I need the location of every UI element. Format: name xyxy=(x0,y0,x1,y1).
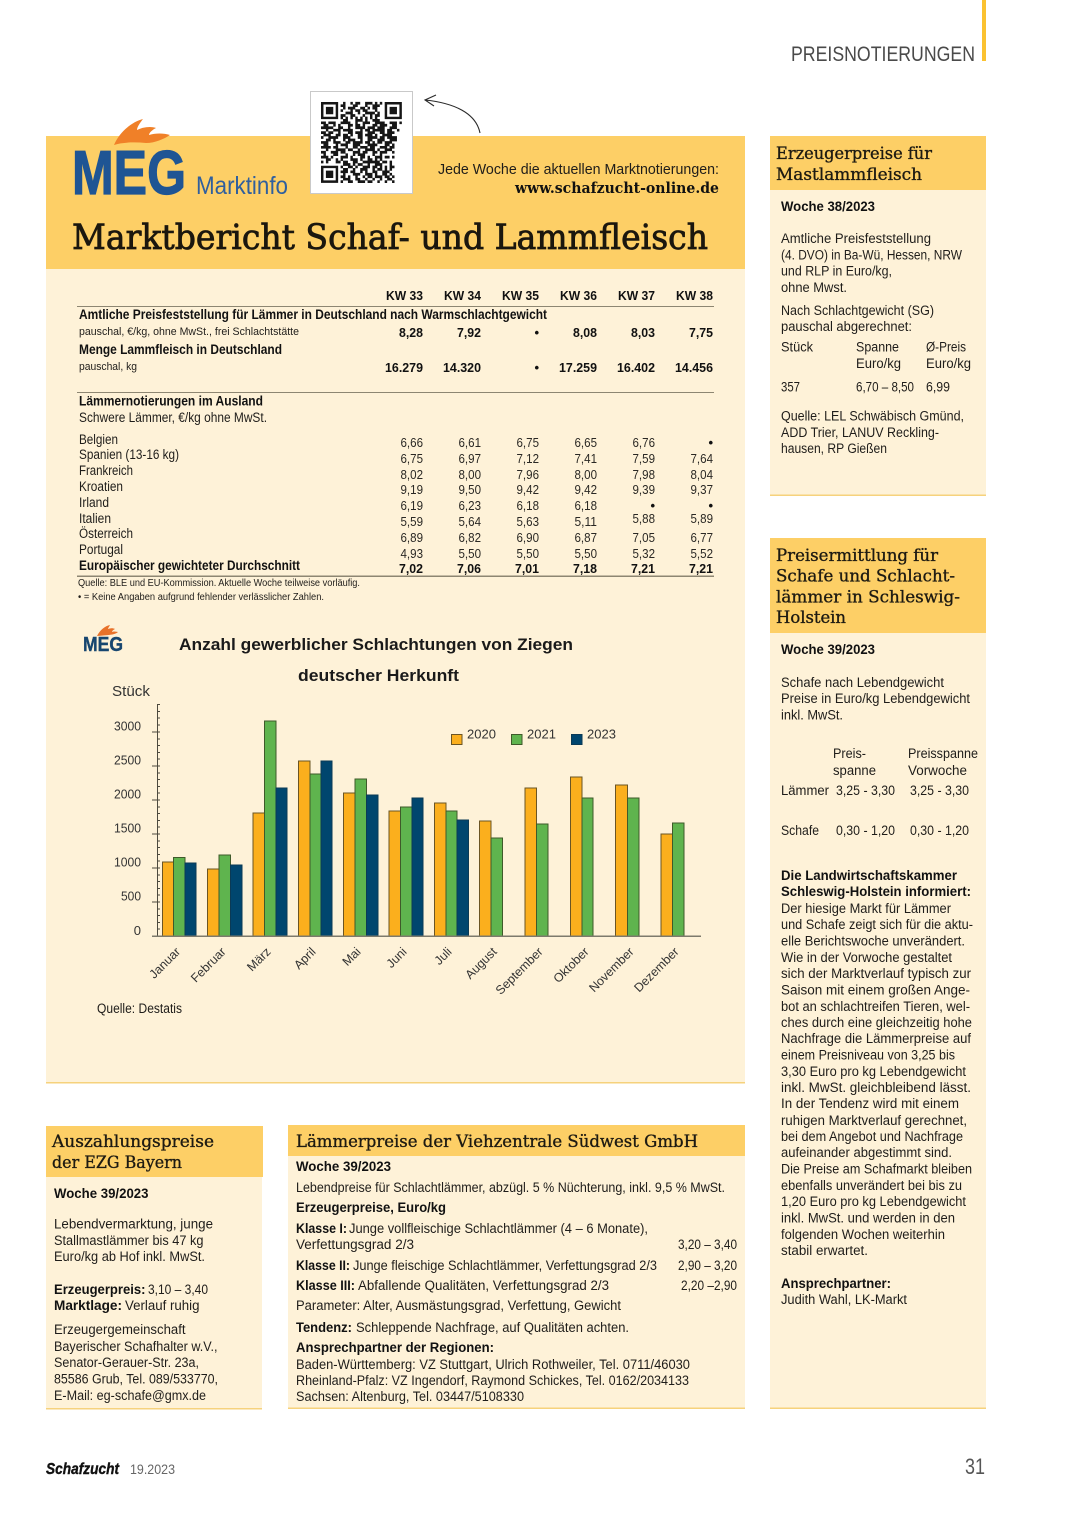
logo: MEG Marktinfo xyxy=(72,119,288,208)
market commentary: ebenfalls unverändert bei bis zu xyxy=(781,1178,962,1193)
text block: Erzeugerpreis: xyxy=(54,1282,146,1297)
month labels: Mai xyxy=(340,945,364,969)
legend: 2020 xyxy=(467,726,496,742)
foreign quotations: 6,76 xyxy=(632,435,655,450)
price block: Schafe nach Lebendgewicht xyxy=(781,675,944,690)
text block xyxy=(54,1186,218,1403)
heading: Lämmerpreise der Viehzentrale Südwest GmbH xyxy=(296,1132,698,1152)
heading xyxy=(51,1132,214,1173)
heading xyxy=(776,546,960,628)
foreign quotations: 5,89 xyxy=(690,511,713,526)
month labels: Juni xyxy=(384,945,410,971)
text block: Woche 39/2023 xyxy=(296,1159,391,1174)
text block: hausen, RP Gießen xyxy=(781,441,887,456)
price block: 0,30 - 1,20 xyxy=(910,823,969,838)
legend: 2023 xyxy=(587,726,616,742)
price table xyxy=(77,288,714,603)
chart title xyxy=(179,635,573,685)
domestic rows: Amtliche Preisfeststellung für Lämmer in Deutschland nach Warmschlachtgewicht xyxy=(79,307,547,322)
text block: Rheinland-Pfalz: VZ Ingendorf, Raymond Schickes, Tel. 0162/2034133 xyxy=(296,1373,689,1388)
price block: Lämmer xyxy=(781,783,829,798)
text block: Euro/kg xyxy=(856,356,901,371)
footer: 31 xyxy=(965,1454,985,1479)
text block: 357 xyxy=(781,380,800,394)
foreign quotations: 6,90 xyxy=(516,530,539,545)
legend: 2021 xyxy=(527,726,556,742)
foreign quotations: Irland xyxy=(79,495,109,510)
foreign quotations: 6,18 xyxy=(574,498,597,513)
table footnotes: Quelle: BLE und EU-Kommission. Aktuelle Woche teilweise vorläufig. xyxy=(78,578,360,589)
heading: der EZG Bayern xyxy=(52,1153,182,1173)
text block: Tendenz: xyxy=(296,1320,352,1335)
foreign quotations: 6,82 xyxy=(458,530,481,545)
price block xyxy=(781,642,978,838)
text block: Stallmastlämmer bis 47 kg xyxy=(54,1233,204,1248)
market commentary: folgenden Wochen weiterhin xyxy=(781,1227,945,1242)
heading: Holstein xyxy=(776,608,846,628)
foreign quotations: 8,04 xyxy=(690,467,713,482)
text block: 6,70 – 8,50 xyxy=(856,380,914,394)
text block: Junge fleischige Schlachtlämmer, Verfettungsgrad 2/3 xyxy=(353,1258,657,1273)
y axis: Stück xyxy=(112,683,151,700)
price block: Schafe xyxy=(781,823,819,838)
heading xyxy=(776,144,933,185)
text block: Amtliche Preisfeststellung xyxy=(781,231,931,246)
price block: Preis- xyxy=(833,746,866,761)
month labels xyxy=(146,944,682,997)
table header: calendar weeks: KW 33 xyxy=(386,288,423,303)
heading: Erzeugerpreise für xyxy=(776,144,933,164)
domestic rows: pauschal, kg xyxy=(79,361,137,373)
foreign quotations: 5,50 xyxy=(574,546,597,561)
foreign quotations: 7,59 xyxy=(632,451,655,466)
foreign quotations: 9,42 xyxy=(574,482,597,497)
text block: Stück xyxy=(781,340,813,354)
y axis xyxy=(112,683,160,938)
foreign quotations: 5,63 xyxy=(516,514,539,529)
market commentary: Ansprechpartner: xyxy=(781,1276,891,1291)
foreign quotations: 7,01 xyxy=(515,561,539,576)
domestic rows: 14.320 xyxy=(443,360,481,375)
text block: 2,20 –2,90 xyxy=(681,1278,737,1293)
month labels: März xyxy=(244,945,274,974)
month labels: April xyxy=(291,945,319,972)
price block: 0,30 - 1,20 xyxy=(836,823,895,838)
section tab: Preisnotierungen: PREISNOTIERUNGEN xyxy=(791,43,975,66)
text block: Euro/kg xyxy=(926,356,971,371)
text block: Sachsen: Altenburg, Tel. 03447/5108330 xyxy=(296,1389,524,1404)
footer: 19.2023 xyxy=(130,1462,175,1477)
foreign quotations xyxy=(79,394,713,576)
foreign quotations: 8,02 xyxy=(400,467,423,482)
foreign quotations: • xyxy=(708,435,713,450)
logo: MEG Marktinfo: MEG xyxy=(72,139,186,208)
market commentary: sich der Marktverlauf typisch zur xyxy=(781,966,971,981)
y axis: 2500 xyxy=(114,752,141,768)
heading: Schafe und Schlacht- xyxy=(776,566,955,586)
price block: spanne xyxy=(833,763,876,778)
foreign quotations: 6,19 xyxy=(400,498,423,513)
market commentary: Wie in der Vorwoche gestaltet xyxy=(781,950,952,965)
y axis: 0 xyxy=(134,923,141,938)
market commentary: In der Tendenz wird mit einem xyxy=(781,1096,959,1111)
price block: 3,25 - 3,30 xyxy=(910,783,969,798)
market commentary: Judith Wahl, LK-Markt xyxy=(781,1292,907,1307)
text block: Parameter: Alter, Ausmästungsgrad, Verfettung, Gewicht xyxy=(296,1298,621,1313)
market commentary: und Schafe zeigt sich für die aktu- xyxy=(781,917,973,932)
foreign quotations: 4,93 xyxy=(400,546,423,561)
foreign quotations: Spanien (13-16 kg) xyxy=(79,447,179,462)
table header: calendar weeks: KW 36 xyxy=(560,288,597,303)
icon: small MEG logo: MEG xyxy=(83,634,123,656)
legend xyxy=(452,726,616,744)
source: Quelle: Destatis xyxy=(97,1001,182,1016)
text block: Euro/kg ab Hof inkl. MwSt. xyxy=(54,1249,205,1264)
market commentary: einem Preisniveau von 3,25 bis xyxy=(781,1048,955,1062)
bar chart: Schlachtungen von Ziegen xyxy=(83,625,701,1016)
text block: 3,20 – 3,40 xyxy=(678,1237,737,1252)
text block: Ø-Preis xyxy=(926,340,966,354)
month labels: Februar xyxy=(188,945,229,985)
heading: Mastlammfleisch xyxy=(776,165,922,185)
text block: Woche 38/2023 xyxy=(781,199,875,214)
text block: Woche 39/2023 xyxy=(54,1186,149,1201)
foreign quotations: 9,39 xyxy=(632,482,655,497)
market commentary: bei dem Angebot und Nachfrage xyxy=(781,1129,963,1144)
foreign quotations: 7,64 xyxy=(690,451,713,466)
domestic rows: 7,75 xyxy=(689,325,713,340)
foreign quotations: 8,00 xyxy=(574,467,597,482)
foreign quotations: 5,64 xyxy=(458,514,481,529)
foreign quotations: Frankreich xyxy=(79,463,133,478)
text block: Schleppende Nachfrage, auf Qualitäten achten. xyxy=(356,1320,629,1335)
foreign quotations: 5,59 xyxy=(400,514,423,529)
panel: Erzeugerpreise für Mastlammfleisch xyxy=(770,136,986,496)
foreign quotations: 6,23 xyxy=(458,498,481,513)
foreign quotations: 6,87 xyxy=(574,530,597,545)
foreign quotations: 9,42 xyxy=(516,482,539,497)
domestic rows: 16.402 xyxy=(617,360,655,375)
bars 2020 xyxy=(162,761,672,936)
text block: Klasse III: xyxy=(296,1278,355,1293)
text block: pauschal abgerechnet: xyxy=(781,319,912,334)
foreign quotations: 5,50 xyxy=(458,546,481,561)
text block: Erzeugergemeinschaft xyxy=(54,1322,186,1337)
text block: Quelle: LEL Schwäbisch Gmünd, xyxy=(781,408,964,424)
y axis: 500 xyxy=(121,888,141,904)
text block: Ansprechpartner der Regionen: xyxy=(296,1340,494,1355)
y axis: 3000 xyxy=(114,718,141,734)
heading: Preisermittlung für xyxy=(776,546,939,566)
table header: calendar weeks xyxy=(386,288,713,303)
foreign quotations: • xyxy=(708,498,713,513)
domestic rows: pauschal, €/kg, ohne MwSt., frei Schlachtstätte xyxy=(79,326,299,338)
domestic rows: 16.279 xyxy=(385,360,423,375)
foreign quotations: 5,11 xyxy=(574,514,597,529)
market commentary: Der hiesige Markt für Lämmer xyxy=(781,901,951,916)
table footnotes: • = Keine Angaben aufgrund fehlender verlässlicher Zahlen. xyxy=(78,592,324,603)
text block: Verlauf ruhig xyxy=(125,1298,200,1313)
header note: www.schafzucht-online.de xyxy=(514,179,719,197)
month labels: Juli xyxy=(432,945,455,968)
panel: Marktbericht xyxy=(46,92,745,1084)
month labels: Oktober xyxy=(551,945,592,986)
market commentary: stabil erwartet. xyxy=(781,1243,868,1258)
market commentary xyxy=(781,868,973,1307)
price block: 3,25 - 3,30 xyxy=(836,783,895,798)
foreign quotations: 5,32 xyxy=(632,546,655,561)
text block: 3,10 – 3,40 xyxy=(148,1282,208,1297)
logo: MEG Marktinfo: Marktinfo xyxy=(196,172,288,200)
heading: Auszahlungspreise xyxy=(51,1132,214,1152)
market commentary: 1,20 Euro pro kg Lebendgewicht xyxy=(781,1194,966,1209)
icon: small MEG logo xyxy=(83,625,123,656)
chart title: Anzahl gewerblicher Schlachtungen von Ziegen xyxy=(179,635,573,654)
text block: Abfallende Qualitäten, Verfettungsgrad 2/3 xyxy=(358,1278,609,1293)
panel: Auszahlungspreise der EZG Bayern xyxy=(46,1126,263,1410)
footer: Schafzucht xyxy=(46,1461,120,1478)
panel: Preisermittlung Schleswig-Holstein xyxy=(770,538,986,1409)
section tab: Preisnotierungen xyxy=(791,0,986,66)
foreign quotations: 7,18 xyxy=(573,561,597,576)
title: Marktbericht Schaf- und Lammfleisch xyxy=(72,218,708,258)
text block: Senator-Gerauer-Str. 23a, xyxy=(54,1355,199,1370)
foreign quotations: 7,12 xyxy=(516,451,539,466)
foreign quotations: 5,50 xyxy=(516,546,539,561)
text block: Junge vollfleischige Schlachtlämmer (4 – 6 Monate), xyxy=(349,1221,648,1236)
market commentary: Saison mit einem großen Ange- xyxy=(781,982,970,998)
domestic rows: 8,28 xyxy=(399,325,423,340)
foreign quotations: 7,96 xyxy=(516,467,539,482)
market commentary: ches durch eine gleichzeitig hohe xyxy=(781,1015,972,1030)
month labels: Januar xyxy=(146,945,183,981)
price block: Woche 39/2023 xyxy=(781,642,875,657)
table footnotes xyxy=(78,578,360,603)
text block xyxy=(296,1159,737,1404)
foreign quotations: 7,02 xyxy=(399,561,423,576)
domestic rows: 8,03 xyxy=(631,325,655,340)
foreign quotations: Lämmernotierungen im Ausland xyxy=(79,394,263,408)
panel: Lämmerpreise der Viehzentrale Südwest GmbH xyxy=(288,1125,745,1409)
text block: (4. DVO) in Ba-Wü, Hessen, NRW xyxy=(781,248,962,262)
QR code xyxy=(310,92,412,194)
text block: Verfettungsgrad 2/3 xyxy=(296,1237,414,1252)
foreign quotations: 6,77 xyxy=(690,530,713,545)
foreign quotations: 7,98 xyxy=(632,467,655,482)
foreign quotations: 5,52 xyxy=(690,546,713,561)
text block: E-Mail: eg-schafe@gmx.de xyxy=(54,1388,206,1403)
table header: calendar weeks: KW 35 xyxy=(502,288,539,303)
y axis: 1000 xyxy=(114,854,141,870)
foreign quotations: 7,21 xyxy=(631,561,655,576)
month labels: September xyxy=(493,945,546,997)
text block: ohne Mwst. xyxy=(781,280,847,295)
price block: inkl. MwSt. xyxy=(781,708,843,722)
domestic rows: 17.259 xyxy=(559,360,597,375)
text block: Marktlage: xyxy=(54,1298,122,1313)
market commentary: Die Landwirtschaftskammer xyxy=(781,868,958,883)
chart title: deutscher Herkunft xyxy=(298,666,459,685)
foreign quotations: 6,89 xyxy=(400,530,423,545)
domestic rows: Menge Lammfleisch in Deutschland xyxy=(79,342,282,357)
domestic rows: 8,08 xyxy=(573,325,597,340)
text block: Lebendpreise für Schlachtlämmer, abzügl. 5 % Nüchterung, inkl. 9,5 % MwSt. xyxy=(296,1180,725,1195)
foreign quotations: Kroatien xyxy=(79,479,123,494)
footer xyxy=(46,1454,985,1479)
market commentary: Schleswig-Holstein informiert: xyxy=(781,884,971,899)
market commentary: aufeinander abgestimmt sind. xyxy=(781,1145,952,1160)
foreign quotations: 9,37 xyxy=(690,482,713,497)
heading: lämmer in Schleswig- xyxy=(776,588,960,608)
foreign quotations: 5,88 xyxy=(632,511,655,526)
text block: ADD Trier, LANUV Reckling- xyxy=(781,425,939,440)
foreign quotations: Italien xyxy=(79,511,111,526)
market commentary: inkl. MwSt. und werden in den xyxy=(781,1210,955,1226)
text block: 85586 Grub, Tel. 089/533770, xyxy=(54,1372,218,1386)
text block: Spanne xyxy=(856,340,899,354)
foreign quotations: Belgien xyxy=(79,432,118,447)
header band xyxy=(46,92,745,269)
text block: und RLP in Euro/kg, xyxy=(781,264,892,278)
foreign quotations: Schwere Lämmer, €/kg ohne MwSt. xyxy=(79,410,267,425)
text block: Nach Schlachtgewicht (SG) xyxy=(781,303,934,318)
text block: 2,90 – 3,20 xyxy=(678,1258,737,1273)
market commentary: elle Berichtswoche unverändert. xyxy=(781,934,965,948)
domestic rows xyxy=(79,307,713,375)
y axis: 2000 xyxy=(114,786,141,802)
text block: Klasse II: xyxy=(296,1258,350,1273)
market commentary: ruhigen Marktverlauf gerechnet, xyxy=(781,1113,967,1128)
foreign quotations: 7,41 xyxy=(574,451,597,466)
foreign quotations: 6,18 xyxy=(516,498,539,513)
table header: calendar weeks: KW 37 xyxy=(618,288,655,303)
text block: Baden-Württemberg: VZ Stuttgart, Ulrich Rothweiler, Tel. 0711/46030 xyxy=(296,1357,690,1372)
price block: Preisspanne xyxy=(908,746,978,761)
bars 2021 xyxy=(174,721,684,936)
y axis: 1500 xyxy=(114,820,141,836)
foreign quotations: 6,61 xyxy=(458,435,481,450)
market commentary: 3,30 Euro pro kg Lebendgewicht xyxy=(781,1064,966,1079)
price block: Vorwoche xyxy=(908,763,967,778)
market commentary: Die Preise am Schafmarkt bleiben xyxy=(781,1162,972,1176)
domestic rows: • xyxy=(534,325,539,340)
foreign quotations: 7,21 xyxy=(689,561,713,576)
foreign quotations: 9,50 xyxy=(458,482,481,497)
text block: Klasse I: xyxy=(296,1221,347,1236)
header note: Jede Woche die aktuellen Marktnotierungen: xyxy=(438,162,719,178)
foreign quotations: • xyxy=(650,498,655,513)
market commentary: inkl. MwSt. gleichbleibend lässt. xyxy=(781,1080,971,1095)
foreign quotations: Europäischer gewichteter Durchschnitt xyxy=(79,558,300,573)
price block: Preise in Euro/kg Lebendgewicht xyxy=(781,691,970,706)
x axis xyxy=(152,936,701,937)
market commentary: Nachfrage die Lämmerpreise auf xyxy=(781,1031,971,1046)
foreign quotations: Portugal xyxy=(79,542,123,557)
arrow to QR code xyxy=(425,95,480,133)
domestic rows: • xyxy=(534,360,539,375)
foreign quotations: 7,06 xyxy=(457,561,481,576)
bars 2023 xyxy=(185,761,468,936)
header note xyxy=(438,162,719,197)
foreign quotations: 6,66 xyxy=(400,435,423,450)
month labels: August xyxy=(462,944,500,982)
text block: Lebendvermarktung, junge xyxy=(54,1216,213,1232)
domestic rows: 7,92 xyxy=(457,325,481,340)
month labels: Dezember xyxy=(631,945,682,995)
foreign quotations: 6,75 xyxy=(400,451,423,466)
text block: Bayerischer Schafhalter w.V., xyxy=(54,1339,218,1354)
foreign quotations: 6,65 xyxy=(574,435,597,450)
text block: Erzeugerpreise, Euro/kg xyxy=(296,1200,446,1215)
month labels: November xyxy=(586,945,637,995)
foreign quotations: Österreich xyxy=(79,526,133,541)
table header: calendar weeks: KW 38 xyxy=(676,288,713,303)
foreign quotations: 6,97 xyxy=(458,451,481,466)
text block: 6,99 xyxy=(926,380,950,394)
market commentary: bot an schlachtreifen Tieren, wel- xyxy=(781,999,970,1014)
table header: calendar weeks: KW 34 xyxy=(444,288,482,303)
text block xyxy=(781,199,971,456)
foreign quotations: 9,19 xyxy=(400,482,423,497)
domestic rows: 14.456 xyxy=(675,360,713,375)
foreign quotations: 7,05 xyxy=(632,530,655,545)
foreign quotations: 6,75 xyxy=(516,435,539,450)
foreign quotations: 8,00 xyxy=(458,467,481,482)
